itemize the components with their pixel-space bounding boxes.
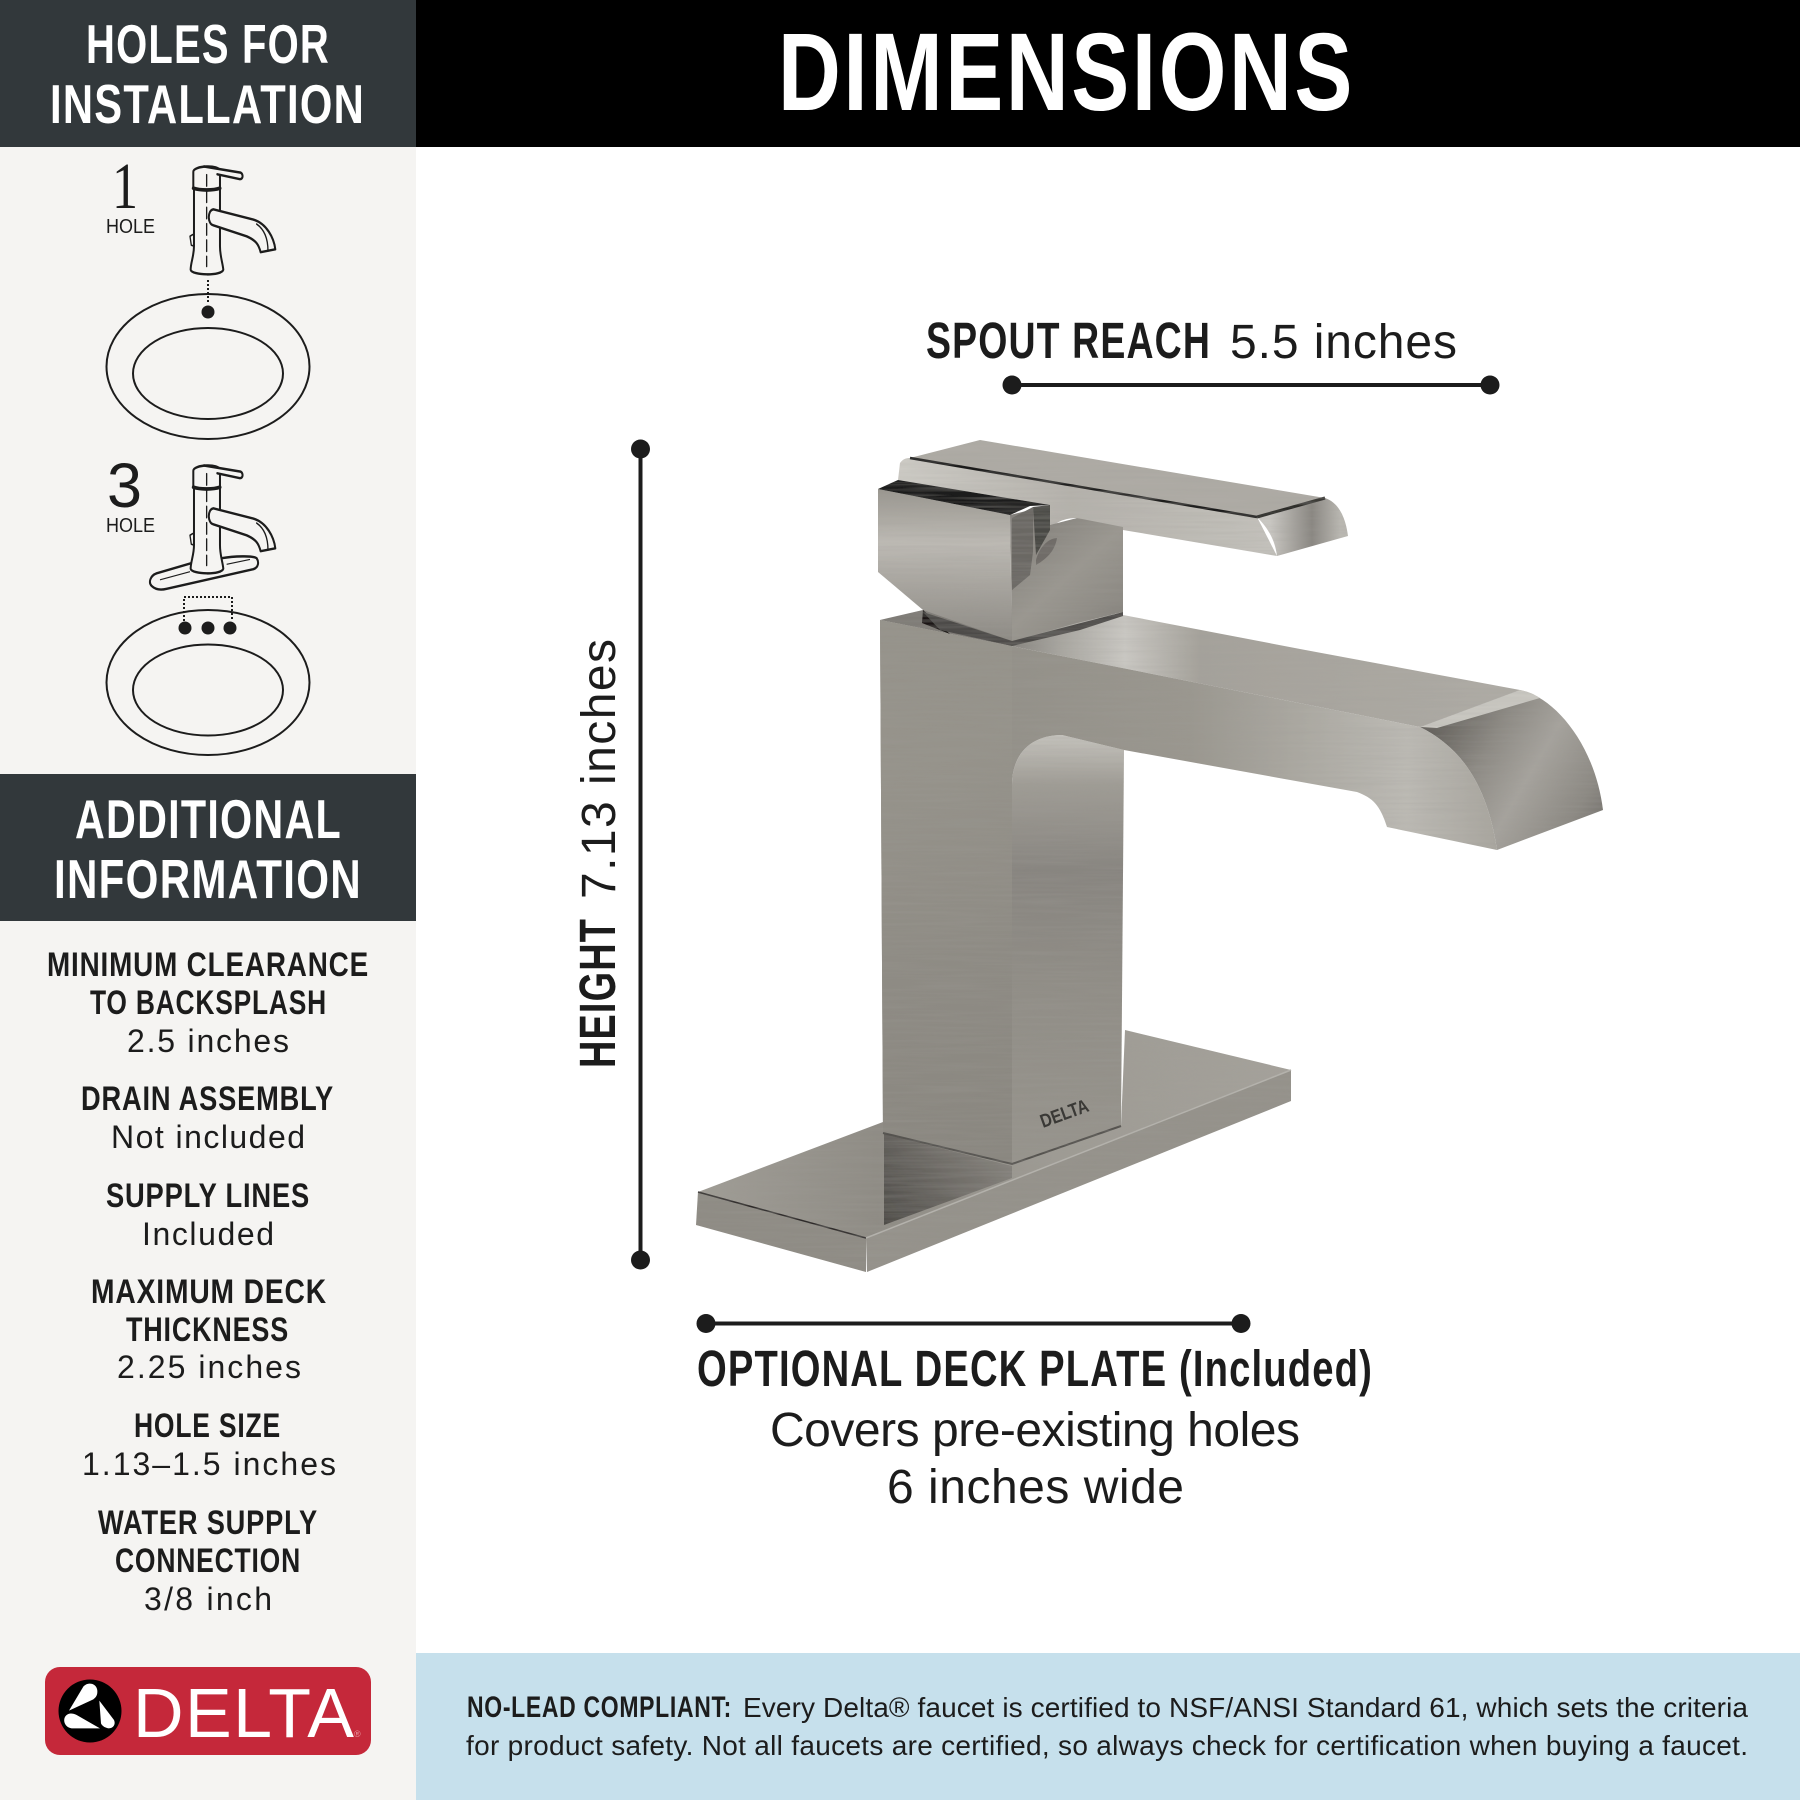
dimension: spout reach	[926, 312, 1500, 394]
text block: additional information list: 2.25 inches	[117, 1349, 301, 1385]
heading: additional information: INFORMATION	[54, 848, 362, 910]
heading: holes for installation: HOLES FOR	[86, 13, 330, 75]
dimension: height: HEIGHT	[569, 918, 626, 1068]
text block: additional information list: 2.5 inches	[127, 1023, 289, 1059]
dimension: optional deck plate	[696, 1314, 1373, 1514]
text block: additional information list: HOLE SIZE	[134, 1407, 281, 1445]
dimension: optional deck plate: Covers pre-existing holes	[770, 1404, 1300, 1457]
dimension: optional deck plate: OPTIONAL DECK PLATE (Included)	[697, 1340, 1373, 1397]
text block: additional information list: CONNECTION	[115, 1542, 301, 1580]
text block: additional information list: SUPPLY LINES	[106, 1177, 310, 1215]
dimension: spout reach: SPOUT REACH	[926, 312, 1211, 369]
text block: additional information list: DRAIN ASSEMBLY	[81, 1080, 334, 1118]
heading: additional information: ADDITIONAL	[75, 788, 342, 850]
logo: Delta: ®	[354, 1729, 361, 1739]
text block: additional information list: TO BACKSPLASH	[90, 984, 327, 1022]
diagram: 1 hole installation: HOLE	[106, 216, 155, 238]
handle lever	[898, 440, 1348, 556]
text block: no-lead compliant note: Every Delta® faucet is certified to NSF/ANSI Standard 61, which sets the criteria	[743, 1692, 1748, 1723]
text block: no-lead compliant note	[466, 1691, 1748, 1761]
illustration: faucet	[696, 440, 1603, 1272]
text block: additional information list: 1.13–1.5 inches	[82, 1446, 336, 1482]
dimension: height: 7.13 inches	[573, 639, 626, 899]
diagram: 3 hole installation: 3	[107, 451, 142, 521]
faucet stamp: Delta: DELTA	[1038, 1096, 1092, 1133]
footer band background	[416, 1653, 1800, 1800]
heading: holes for installation: INSTALLATION	[50, 73, 365, 135]
text block: additional information list: 3/8 inch	[144, 1581, 272, 1617]
logo: Delta	[45, 1667, 371, 1755]
diagram: 3 hole installation: HOLE	[106, 515, 155, 537]
title banner: dimensions	[416, 0, 1800, 147]
handle block	[878, 480, 1123, 646]
text block: additional information list: MINIMUM CLEARANCE	[47, 946, 369, 984]
text block: additional information list: WATER SUPPLY	[98, 1504, 318, 1542]
deck plate	[696, 1030, 1291, 1272]
heading: holes for installation	[0, 0, 416, 147]
text block: additional information list: Not included	[111, 1119, 305, 1155]
text block: additional information list	[47, 946, 369, 1617]
spout top surface	[880, 610, 1520, 727]
title banner: dimensions: DIMENSIONS	[778, 11, 1355, 134]
dimension: optional deck plate: 6 inches wide	[887, 1461, 1184, 1514]
text block: additional information list: MAXIMUM DECK	[91, 1273, 327, 1311]
dimension: spout reach: 5.5 inches	[1230, 316, 1457, 369]
body and spout front face	[880, 620, 1497, 1164]
spout end curve	[1420, 690, 1603, 850]
diagram: 3 hole installation	[106, 451, 310, 755]
text block: additional information list: Included	[142, 1216, 274, 1252]
text block: additional information list: THICKNESS	[126, 1311, 289, 1349]
logo: Delta: DELTA	[133, 1674, 354, 1752]
column right face	[1012, 735, 1124, 1164]
text block: no-lead compliant note: for product safety. Not all faucets are certified, so always check for certification when buying a faucet.	[466, 1730, 1748, 1761]
heading: additional information	[0, 774, 416, 921]
column front face	[880, 620, 1012, 1164]
diagram: 1 hole installation	[106, 150, 310, 439]
diagram: 1 hole installation: 1	[112, 150, 138, 223]
dimension: height	[569, 440, 650, 1270]
sidebar background	[0, 0, 416, 1800]
text block: no-lead compliant note: NO-LEAD COMPLIANT:	[467, 1691, 732, 1724]
